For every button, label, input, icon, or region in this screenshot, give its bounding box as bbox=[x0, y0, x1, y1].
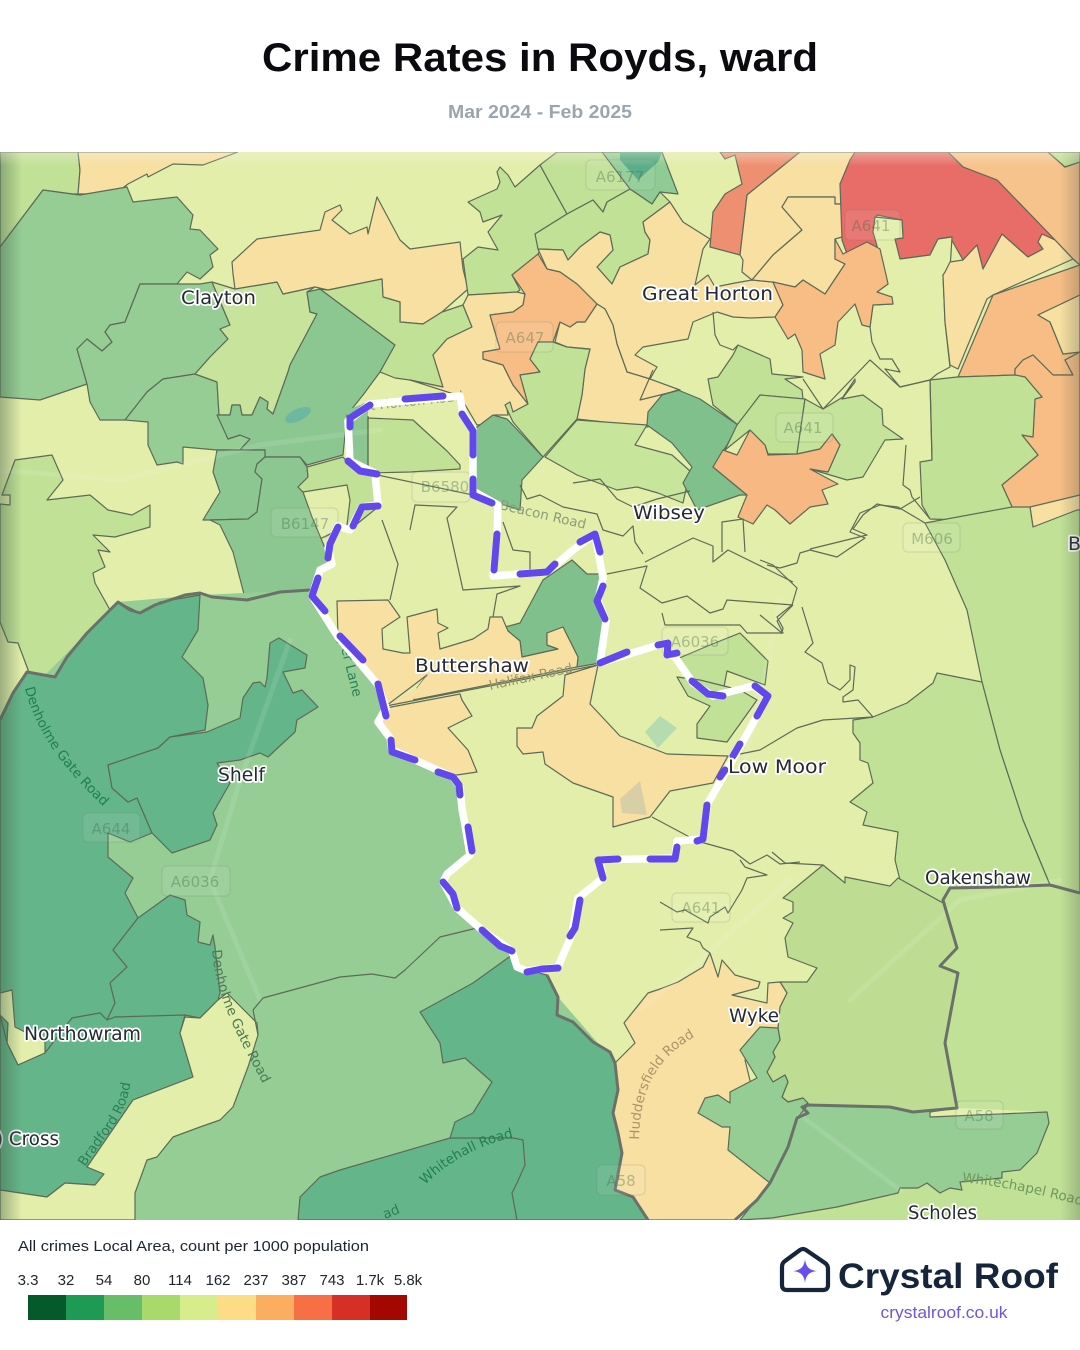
faint roads bbox=[0, 430, 1060, 1190]
legend values: 114 bbox=[168, 1272, 192, 1289]
choropleth areas west bbox=[0, 152, 648, 1220]
road names: Huddersfield Road bbox=[629, 1028, 694, 1138]
website: crystalroof.co.uk bbox=[880, 1304, 1008, 1322]
ward outline: Royds bbox=[312, 396, 768, 972]
legend values: 3.3 bbox=[18, 1272, 38, 1289]
road shields: A6177 bbox=[596, 168, 644, 186]
legend bbox=[18, 1238, 423, 1320]
road shields bbox=[83, 160, 1003, 1195]
logo bbox=[782, 1249, 1058, 1322]
road shields: A641 bbox=[784, 419, 822, 437]
legend values: 32 bbox=[58, 1272, 74, 1289]
road names: Halifax Road bbox=[488, 661, 574, 694]
legend values: 237 bbox=[243, 1272, 269, 1289]
road names: at Horton Road bbox=[361, 388, 464, 415]
place labels: Buttershaw bbox=[415, 655, 529, 677]
legend colour bar bbox=[28, 1295, 407, 1320]
choropleth areas north bbox=[232, 152, 1080, 527]
place labels: Great Horton bbox=[642, 283, 773, 305]
road shields: A58 bbox=[606, 1172, 636, 1190]
legend title: All crimes Local Area, count per 1000 population bbox=[18, 1238, 369, 1255]
title: Crime Rates in Royds, ward bbox=[262, 36, 818, 80]
icon: house with star bbox=[782, 1249, 828, 1290]
road names bbox=[25, 388, 1080, 1220]
road shields: M606 bbox=[911, 530, 953, 548]
legend values: 743 bbox=[319, 1272, 345, 1289]
legend values: 162 bbox=[205, 1272, 231, 1289]
road names: Bradford Road bbox=[78, 1082, 130, 1166]
legend values: 54 bbox=[96, 1272, 112, 1289]
choropleth areas east and south bbox=[613, 507, 1080, 1220]
edge vignette bbox=[0, 152, 1080, 1220]
place labels: Low Moor bbox=[728, 756, 826, 778]
road shields: A6036 bbox=[671, 633, 719, 651]
place labels: Wibsey bbox=[633, 502, 705, 524]
place labels: Shelf bbox=[218, 764, 266, 786]
district boundary thick lines bbox=[0, 590, 1080, 1220]
road shields: A58 bbox=[964, 1107, 994, 1125]
place labels bbox=[0, 283, 1080, 1224]
road names: Denholme Gate Road bbox=[212, 950, 272, 1083]
legend values: 80 bbox=[134, 1272, 150, 1289]
choropleth areas inside Royds ward bbox=[283, 404, 768, 827]
legend values: 387 bbox=[281, 1272, 307, 1289]
legend values bbox=[18, 1272, 423, 1289]
road shields: B6147 bbox=[281, 515, 329, 533]
map bbox=[0, 152, 1080, 1220]
map base bbox=[0, 152, 1080, 1220]
road shields: A641 bbox=[682, 899, 720, 917]
road shields: B6580 bbox=[421, 478, 469, 496]
date range: Mar 2024 - Feb 2025 bbox=[448, 102, 632, 122]
road names: Whitehall Road bbox=[418, 1128, 512, 1183]
road names: Beacon Road bbox=[498, 497, 588, 533]
legend values: 1.7k bbox=[356, 1272, 385, 1289]
road names: Denholme Gate Road bbox=[25, 686, 110, 806]
road shields: A647 bbox=[506, 329, 544, 347]
place labels: Northowram bbox=[24, 1023, 141, 1045]
place labels: Oakenshaw bbox=[925, 867, 1031, 889]
place labels: Clayton bbox=[181, 287, 256, 309]
road shields: A6036 bbox=[171, 873, 219, 891]
boundary lines bbox=[253, 312, 932, 1220]
place labels: Wyke bbox=[729, 1005, 779, 1027]
legend values: 5.8k bbox=[394, 1272, 423, 1289]
road shields: A644 bbox=[92, 820, 130, 838]
road names: per Lane bbox=[335, 637, 365, 699]
road shields: A641 bbox=[852, 217, 890, 235]
brand name: Crystal Roof bbox=[838, 1257, 1058, 1296]
